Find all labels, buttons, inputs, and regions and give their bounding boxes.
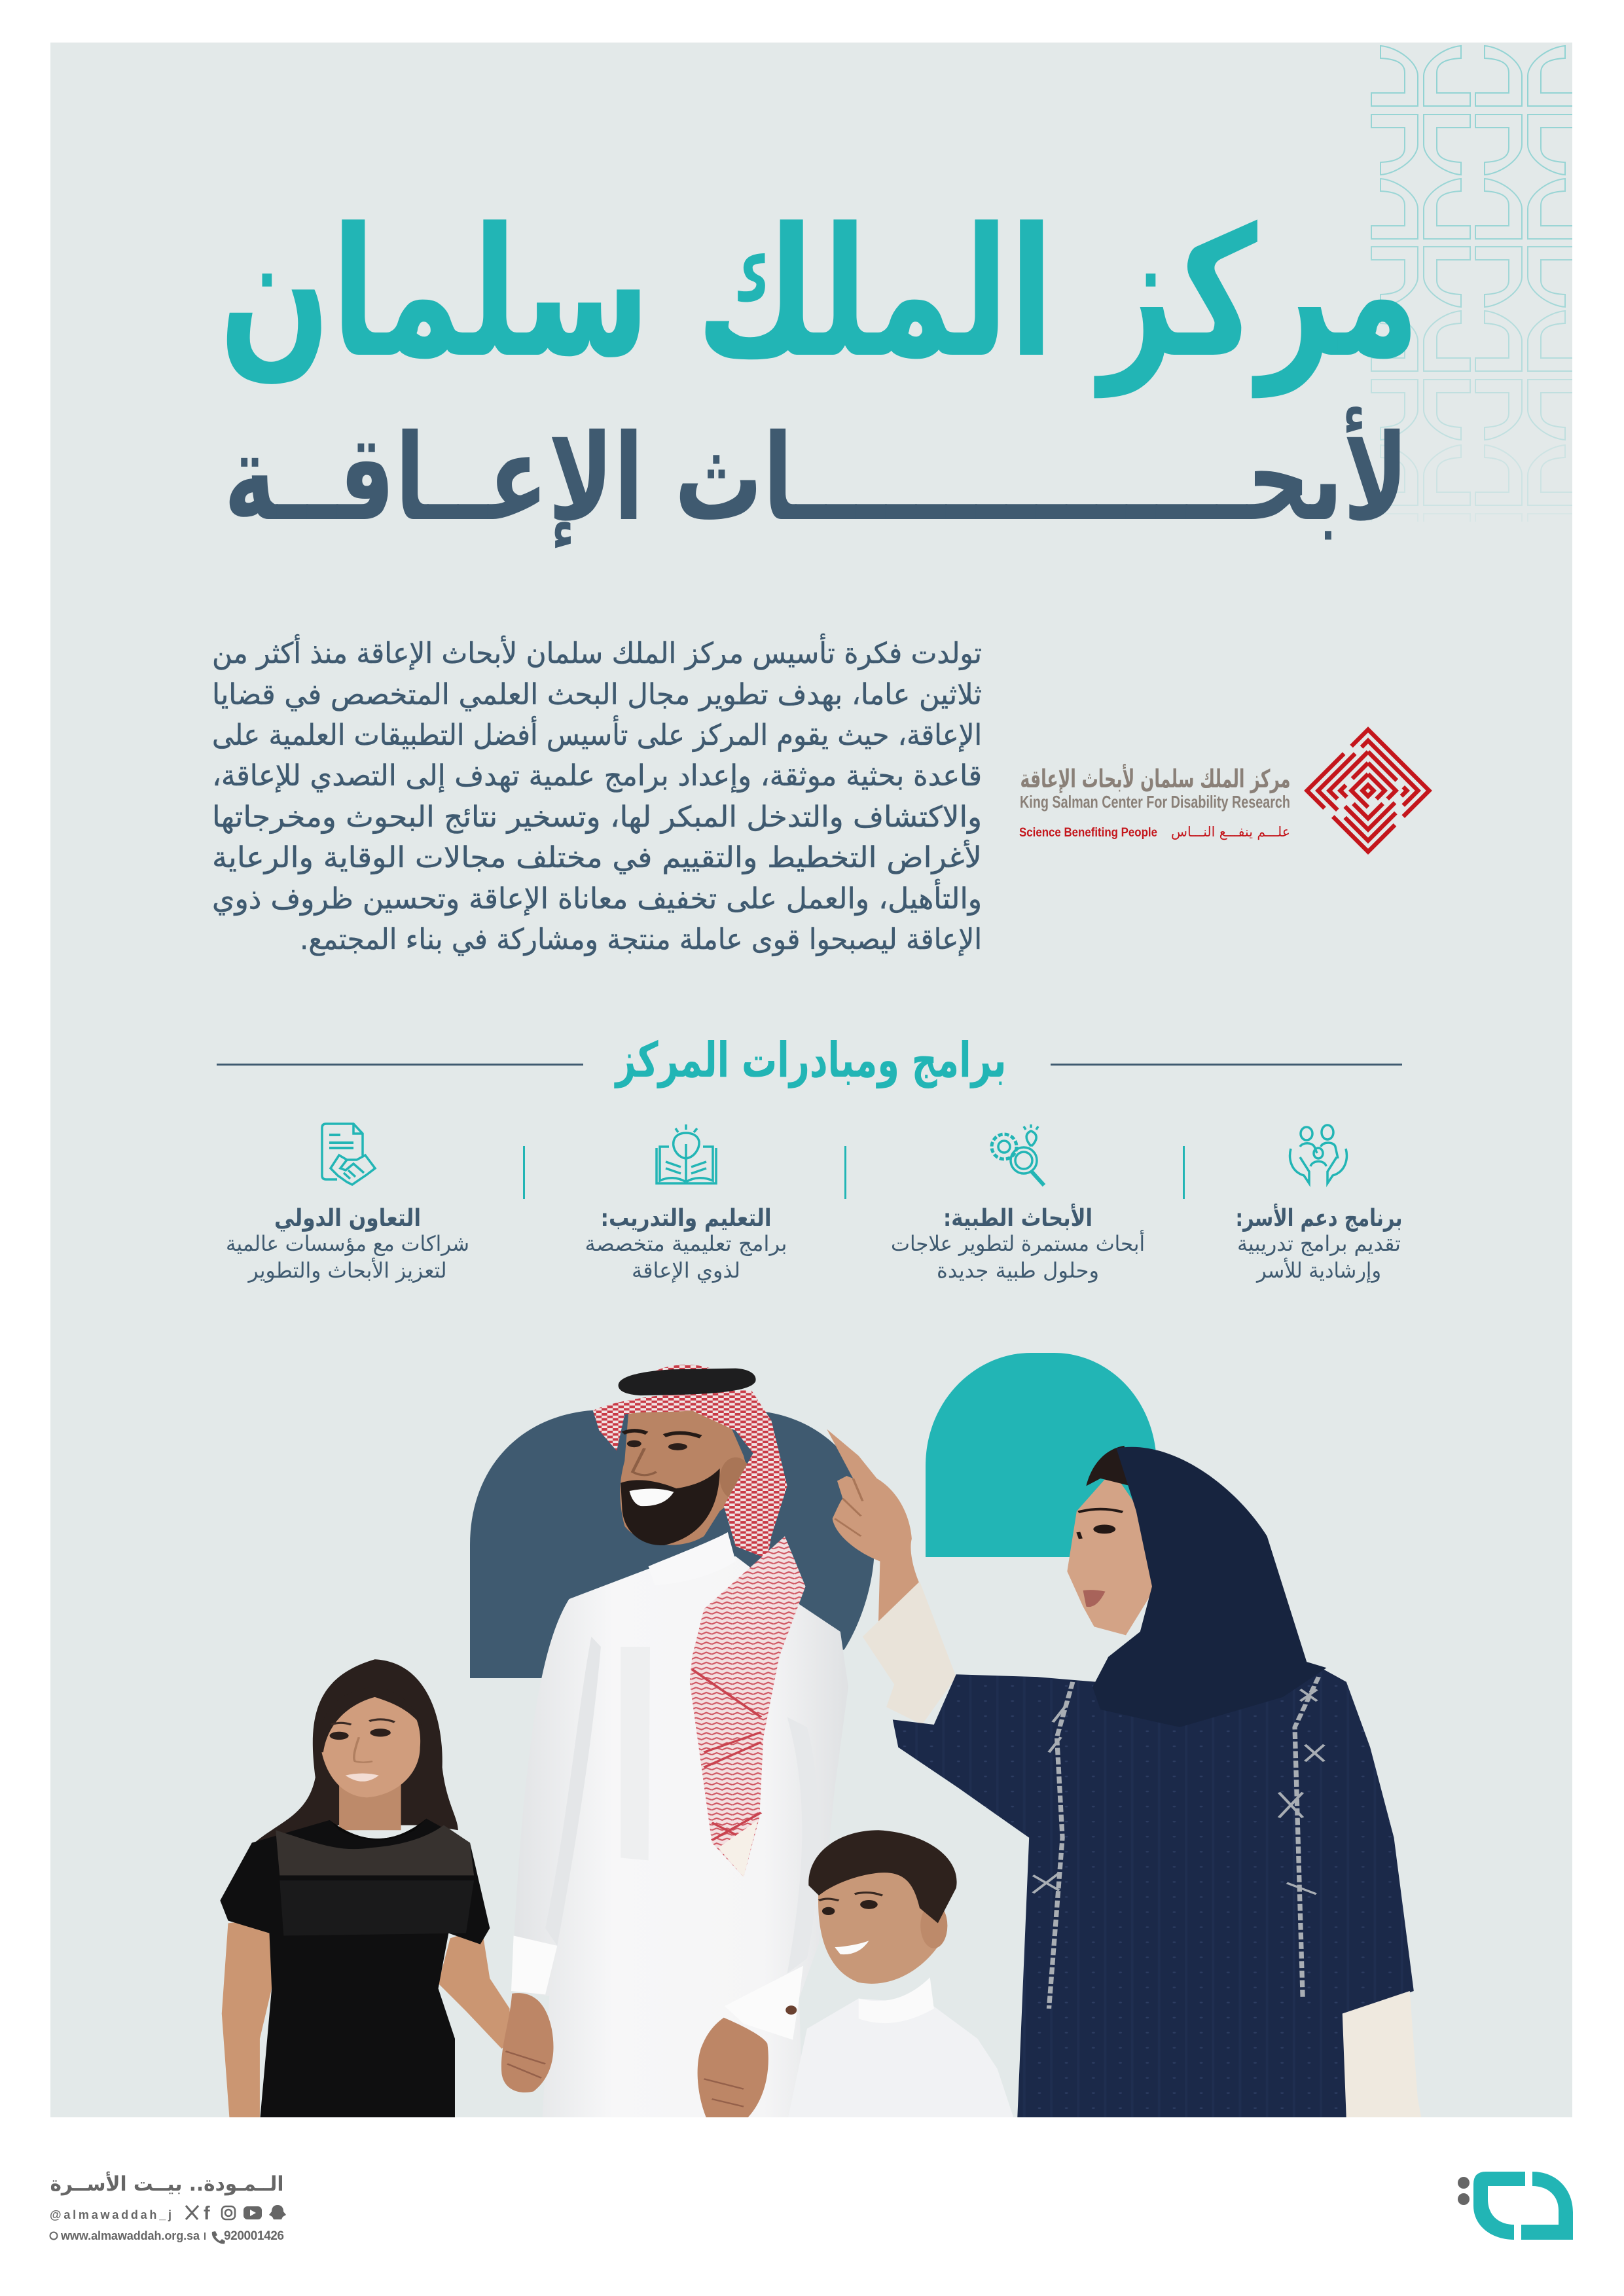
program: family support: برنامج دعم الأسر: — [1236, 1203, 1402, 1232]
icon: document and handshake — [322, 1124, 375, 1185]
figure: girl — [220, 1659, 510, 2122]
intro paragraph: الإعاقة ليصبحوا قوى عاملة منتجة ومشاركة في بناء المجتمع. — [300, 923, 982, 956]
footer tagline — [50, 2171, 286, 2244]
intro paragraph: لأغراض التخطيط والتقييم في مختلف مجالات الوقاية والرعاية — [212, 839, 982, 874]
footer tagline: @almawaddah_j — [50, 2208, 171, 2221]
program: education and training: لذوي الإعاقة — [632, 1258, 740, 1283]
intro paragraph: ثلاثين عاما، بهدف تطوير مجال البحث العلمي المتخصص في قضايا — [212, 678, 982, 711]
family photo illustration — [220, 1365, 1422, 2122]
program: medical research: أبحاث مستمرة لتطوير علاجات — [891, 1230, 1145, 1256]
logo emblem — [1307, 730, 1429, 852]
decorative pattern: top right — [1371, 45, 1572, 522]
program: education and training: برامج تعليمية متخصصة — [585, 1231, 787, 1256]
divider lines — [523, 1146, 1185, 1199]
footer tagline: f — [204, 2203, 210, 2224]
intro paragraph: تولدت فكرة تأسيس مركز الملك سلمان لأبحاث الإعاقة منذ أكثر من — [212, 633, 982, 670]
intro paragraph: قاعدة بحثية موثقة، وإعداد برامج علمية تهدف إلى التصدي للإعاقة، — [212, 759, 982, 793]
program: family support — [1236, 1203, 1402, 1283]
section heading — [217, 1032, 1402, 1089]
navy arch — [470, 1410, 875, 1678]
logo: King Salman Center: King Salman Center For Disability Research — [1020, 792, 1290, 812]
program: international cooperation: لتعزيز الأبحاث والتطوير — [247, 1257, 446, 1283]
logo: King Salman Center: علـــم ينفـــع النـــاس — [1171, 824, 1290, 840]
intro paragraph: والتأهيل، والعمل على تخفيف معاناة الإعاقة وتحسين ظروف ذوي — [212, 878, 982, 916]
figure: woman — [827, 1429, 1422, 2122]
figure: boy — [787, 1830, 1015, 2122]
program: education and training — [585, 1205, 787, 1283]
figure: man — [501, 1365, 848, 2122]
program: family support: تقديم برامج تدريبية — [1237, 1231, 1401, 1256]
program: international cooperation: التعاون الدولي — [274, 1205, 421, 1232]
footer tagline: www.almawaddah.org.sa — [60, 2229, 200, 2242]
footer tagline: 920001426 — [224, 2229, 284, 2243]
logo: King Salman Center — [1019, 730, 1429, 852]
icon: gears and magnifier — [992, 1124, 1044, 1185]
program: international cooperation — [226, 1205, 469, 1283]
section heading: برامج ومبادرات المركز — [614, 1032, 1007, 1089]
intro paragraph — [212, 633, 982, 956]
footer tagline: الــمـودة.. بيــت الأســرة — [50, 2171, 284, 2196]
program: international cooperation: شراكات مع مؤسسات عالمية — [226, 1231, 469, 1256]
program: education and training: التعليم والتدريب: — [601, 1205, 771, 1232]
program: family support: وإرشادية للأسر — [1255, 1257, 1381, 1283]
intro paragraph: الإعاقة، حيث يقوم المركز على تأسيس أفضل التطبيقات العلمية على — [212, 715, 982, 752]
logo: King Salman Center: مركز الملك سلمان لأبحاث الإعاقة — [1020, 763, 1291, 793]
icon: family in hands — [1290, 1125, 1346, 1183]
teal arch — [926, 1353, 1157, 1557]
program: medical research: الأبحاث الطبية: — [943, 1203, 1092, 1232]
icon: open book with bulb — [657, 1124, 716, 1183]
intro paragraph: والاكتشاف والتدخل المبكر لها، وتسخير نتائج البحوث ومخرجاتها — [212, 800, 982, 834]
program: medical research: وحلول طبية جديدة — [937, 1258, 1099, 1283]
Mawaddah logo — [1458, 2172, 1573, 2240]
program: medical research — [891, 1203, 1145, 1283]
logo: King Salman Center: Science Benefiting People — [1019, 826, 1157, 840]
